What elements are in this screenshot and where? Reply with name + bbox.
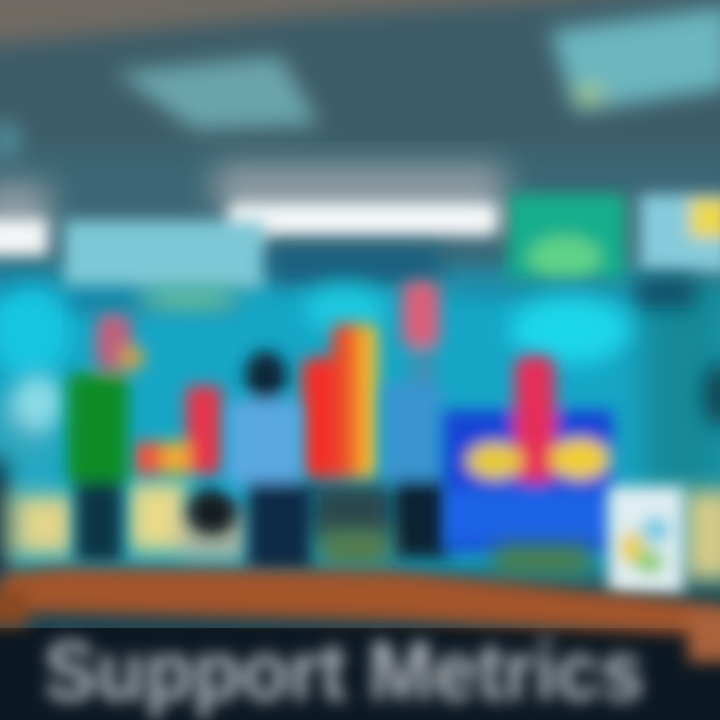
cyan glow xyxy=(510,296,630,364)
panel: light blue xyxy=(64,220,266,288)
dark headers xyxy=(0,250,720,427)
icon: yellow ellipses xyxy=(467,443,523,479)
background wall xyxy=(0,0,720,575)
banner: white xyxy=(228,202,498,236)
dark accent at right edge xyxy=(704,363,720,427)
chart: blue panel xyxy=(443,356,613,552)
banner: left white xyxy=(0,218,48,256)
person: standing pink head xyxy=(383,281,448,558)
caption text: Support Metrics xyxy=(44,624,644,718)
chart: left bars xyxy=(134,386,222,474)
person: green shirt xyxy=(68,314,145,562)
ceiling panel: left xyxy=(115,56,320,130)
ceiling panel: right xyxy=(550,6,720,112)
panel: green xyxy=(508,194,626,282)
banner haze xyxy=(0,165,505,225)
lower sand blocks xyxy=(0,374,720,590)
plants on shelf xyxy=(320,530,590,575)
chart: rainbow bars xyxy=(302,324,378,478)
ceiling band xyxy=(0,0,720,160)
shelf xyxy=(0,568,720,662)
wall panels row xyxy=(0,194,720,288)
bottom dark area xyxy=(0,628,720,720)
small card xyxy=(608,486,684,594)
icon: yellow square xyxy=(690,198,720,238)
bar: red xyxy=(515,356,555,482)
panel: right light xyxy=(640,194,720,272)
person: blue shirt xyxy=(187,351,312,572)
